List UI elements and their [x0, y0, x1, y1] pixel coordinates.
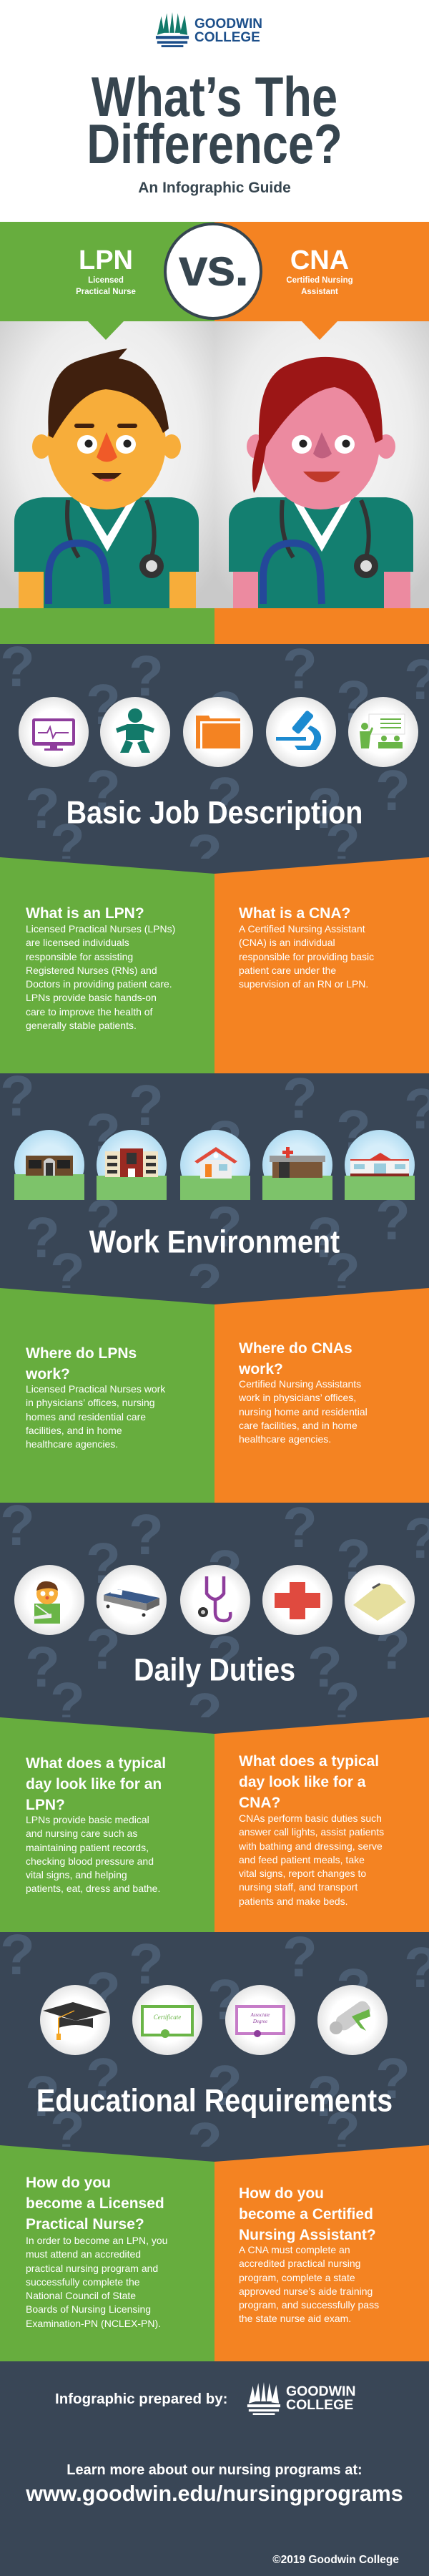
question mark pattern: section 1: ? [86, 758, 121, 822]
footer logo: GOODWIN [286, 2384, 356, 2399]
text: where do LPNs work: Licensed Practical Nurses work [26, 1383, 165, 1395]
text: where do CNAs work: nursing home and residential [239, 1406, 368, 1418]
question mark pattern: section 3 [0, 1503, 429, 1717]
text: where do CNAs work [239, 1340, 368, 1445]
panel: work environment [0, 1288, 429, 1503]
question mark pattern: section 4: ? [86, 2046, 121, 2110]
section title: Daily Duties: Daily Duties [134, 1652, 295, 1688]
text: what is an LPN: LPNs provide basic hands-on [26, 992, 157, 1003]
text: what is an LPN: responsible for assisting [26, 951, 133, 962]
question mark pattern: section 2: ? [25, 1206, 60, 1269]
question mark pattern: section 3: ? [307, 1635, 342, 1699]
icon: office [14, 1130, 84, 1200]
question mark pattern: section 4: ? [86, 1961, 121, 2024]
question mark pattern: section 4: ? [129, 1932, 164, 1996]
text: become CNA [239, 2185, 379, 2324]
question mark pattern: section 4 [0, 1932, 429, 2147]
icon: hospital bed [97, 1565, 167, 1635]
LPN label: LPN [79, 245, 133, 275]
icon: red cross [262, 1565, 332, 1635]
question mark pattern: section 4: ? [307, 2064, 342, 2128]
section title: Educational Requirements: Educational Requirements [36, 2083, 393, 2119]
text: become LPN: National Council of State [26, 2290, 136, 2301]
question mark pattern: section 2: ? [86, 1102, 121, 1166]
section title: Basic Job Description: Basic Job Description [66, 795, 363, 831]
question mark pattern: section 4: ? [207, 1968, 242, 2031]
text: where do LPNs work: in physicians’ offices, nursing [26, 1397, 155, 1408]
text: what is an LPN: Licensed Practical Nurses (LPNs) [26, 923, 175, 935]
icon: apartment [97, 1130, 167, 1200]
question mark pattern: section 3: ? [129, 1503, 164, 1566]
icon: folder [183, 697, 253, 767]
text: become LPN: practical nursing program and [26, 2263, 158, 2274]
footer: copyright: ©2019 Goodwin College [272, 2554, 399, 2566]
text: typical day LPN: checking blood pressure and [26, 1855, 154, 1867]
text: where do CNAs work: healthcare agencies. [239, 1433, 331, 1445]
question mark pattern: section 4: ? [25, 2064, 60, 2128]
question mark pattern: section 1: ? [129, 644, 164, 708]
question mark pattern: section 4: ? [375, 2046, 410, 2110]
text: what is a CNA: supervision of an RN or LPN. [239, 978, 368, 990]
question mark pattern: section 2: ? [207, 1109, 242, 1173]
icon: microscope [266, 697, 336, 767]
text: become LPN [26, 2175, 167, 2329]
question mark pattern: section 2: ? [375, 1188, 410, 1252]
text: where do CNAs work: Where do CNAs [239, 1340, 352, 1357]
text: where do LPNs work: Where do LPNs [26, 1345, 137, 1362]
female nurse [229, 357, 413, 608]
text: typical day LPN: LPN? [26, 1797, 65, 1813]
question mark pattern: section 2: ? [129, 1073, 164, 1137]
footer: prepared by [55, 2382, 356, 2415]
question mark pattern: section 1: ? [86, 673, 121, 736]
text: what is a CNA: What is a CNA? [239, 905, 350, 922]
icon: monitor [19, 697, 89, 767]
question mark pattern: section 2: ? [307, 1206, 342, 1269]
text: typical day CNA: What does a typical [239, 1753, 379, 1770]
text: where do CNAs work: care facilities, and in home [239, 1420, 358, 1431]
question mark pattern: section 3: ? [86, 1617, 121, 1681]
text: what is a CNA: A Certified Nursing Assistant [239, 923, 365, 935]
text: what is an LPN: Doctors in providing patient care. [26, 978, 172, 990]
footer: url: www.goodwin.edu/nursingprograms [26, 2482, 403, 2506]
question mark pattern: section 3: ? [336, 1528, 371, 1591]
icon: file folder [345, 1565, 415, 1635]
CNA label: Certified Nursing [286, 276, 353, 285]
question mark pattern: section 1: ? [375, 758, 410, 822]
icon: associate degree: Associate [250, 2012, 270, 2018]
header band: LPN vs CNA [0, 222, 429, 321]
text: where do LPNs work: facilities, and in home [26, 1425, 122, 1436]
title [87, 65, 342, 175]
CNA label: Assistant [301, 288, 338, 296]
panel: basic job description [0, 857, 429, 1073]
footer: prepared by: Infographic prepared by: [55, 2391, 227, 2407]
icon: clinic [262, 1130, 332, 1200]
question mark pattern: section 3: ? [375, 1617, 410, 1681]
title: What’s The [92, 65, 337, 128]
question mark pattern: section 1: ? [207, 766, 242, 829]
icon: stethoscope [180, 1565, 250, 1635]
question mark pattern: section 1: ? [336, 669, 371, 733]
text: become LPN: must attend an accredited [26, 2248, 141, 2260]
text: become CNA: program, and successfully pass [239, 2299, 379, 2311]
section title: Work Environment: Work Environment [89, 1224, 340, 1260]
text: become CNA: How do you [239, 2185, 324, 2202]
question mark pattern: section 2: ? [86, 1188, 121, 1252]
text: typical day CNA: patients and make beds. [239, 1896, 348, 1907]
footer logo [247, 2382, 356, 2415]
question mark pattern: section 3: ? [207, 1624, 242, 1688]
nurses illustration [0, 321, 429, 644]
text: become LPN: Examination-PN (NCLEX-PN). [26, 2318, 161, 2329]
icon: house [180, 1130, 250, 1200]
text: become CNA: program, complete a state [239, 2272, 355, 2283]
CNA label: CNA [290, 245, 349, 275]
text: what is a CNA: responsible for providing basic [239, 951, 374, 962]
text: what is an LPN: care to improve the health of [26, 1006, 152, 1018]
text: typical day LPN: vital signs, and helping [26, 1869, 127, 1880]
text: become LPN: successfully complete the [26, 2276, 140, 2288]
text: become LPN: How do you [26, 2175, 111, 2191]
question mark pattern: section 1 [0, 644, 429, 859]
text: what is an LPN [26, 905, 175, 1031]
icons row: daily duties [14, 1565, 415, 1635]
text: typical day LPN: maintaining patient records, [26, 1842, 149, 1853]
header logo: COLLEGE [194, 30, 260, 45]
LPN label: Practical Nurse [76, 288, 136, 296]
text: where do LPNs work: work? [26, 1366, 70, 1382]
icons row: work environment [14, 1130, 415, 1200]
header logo: GOODWIN [194, 16, 262, 31]
icon: certificate [132, 1985, 202, 2055]
text: typical day CNA: CNAs perform basic duties such [239, 1813, 382, 1824]
text: become CNA: A CNA must complete an [239, 2244, 350, 2255]
text: become CNA: Nursing Assistant? [239, 2227, 376, 2243]
text: typical day CNA: vital signs, report changes to [239, 1868, 366, 1879]
CNA label [286, 245, 353, 296]
text: what is an LPN: Registered Nurses (RNs) and [26, 965, 157, 976]
text: typical day CNA: CNA? [239, 1795, 280, 1811]
icon: diploma scroll [317, 1985, 388, 2055]
text: what is an LPN: generally stable patients. [26, 1020, 137, 1031]
vs circle: vs. [179, 238, 247, 297]
question mark pattern: section 2: ? [207, 1195, 242, 1259]
LPN label: Licensed [88, 276, 124, 285]
icon: associate degree [225, 1985, 295, 2055]
white header background [0, 0, 429, 222]
icon: associate degree: Degree [252, 2019, 267, 2024]
text: typical day LPN: patients, eat, dress and bathe. [26, 1883, 160, 1894]
subtitle: An Infographic Guide [138, 180, 291, 196]
header logo [156, 12, 262, 47]
text: typical day CNA [239, 1753, 384, 1907]
question mark pattern: section 3: ? [86, 1531, 121, 1595]
text: become LPN: Boards of Nursing Licensing [26, 2303, 151, 2315]
text: become LPN: Practical Nurse? [26, 2216, 144, 2233]
text: typical day LPN: What does a typical [26, 1755, 166, 1772]
question mark pattern: section 3: ? [25, 1635, 60, 1699]
text: typical day LPN: LPNs provide basic medical [26, 1814, 149, 1825]
text: what is a CNA: (CNA) is an individual [239, 937, 335, 948]
text: become CNA: become a Certified [239, 2206, 373, 2223]
question mark pattern: section 1: ? [207, 680, 242, 743]
text: where do LPNs work: healthcare agencies. [26, 1438, 118, 1450]
title: Difference? [87, 112, 342, 175]
icon: graduation cap [40, 1985, 110, 2055]
icon: teacher [348, 697, 418, 767]
text: become LPN: become a Licensed [26, 2195, 164, 2212]
question mark pattern: section 4: ? [207, 2054, 242, 2117]
text: typical day CNA: nursing staff, and transport [239, 1881, 358, 1893]
LPN label [76, 245, 136, 296]
text: typical day CNA: and feed patient meals, take [239, 1854, 365, 1865]
text: where do LPNs work: homes and residential care [26, 1411, 146, 1423]
text: become LPN: In order to become an LPN, you [26, 2235, 167, 2246]
question mark pattern: section 1: ? [25, 776, 60, 840]
text: what is a CNA: patient care under the [239, 965, 336, 976]
male nurse [14, 348, 199, 608]
text: become CNA: the state nurse aid exam. [239, 2313, 351, 2324]
text: where do LPNs work [26, 1345, 166, 1450]
icon: patient with sling [14, 1565, 84, 1635]
text: what is an LPN: are licensed individuals [26, 937, 129, 948]
question mark pattern: section 2 [0, 1073, 429, 1288]
icon: baby [100, 697, 170, 767]
text: what is a CNA [239, 905, 374, 990]
icon: certificate: Certificate [154, 2014, 181, 2021]
text: where do CNAs work: work in physicians’ offices, [239, 1392, 356, 1403]
question mark pattern: section 1: ? [307, 776, 342, 840]
text: typical day CNA: with bathing and dressing, serve [239, 1840, 383, 1852]
text: typical day CNA: day look like for a [239, 1774, 365, 1790]
text: what is an LPN: What is an LPN? [26, 905, 144, 922]
question mark pattern: section 4: ? [336, 1957, 371, 2021]
panel: educational requirements [0, 2145, 429, 2361]
text: typical day LPN: day look like for an [26, 1776, 162, 1792]
icons row: job description [19, 697, 418, 767]
text: where do CNAs work: Certified Nursing Assistants [239, 1378, 361, 1390]
panel: daily duties [0, 1717, 429, 1932]
question mark pattern: section 2: ? [336, 1098, 371, 1162]
text: become CNA: approved nurse’s aide training [239, 2285, 373, 2297]
text: typical day LPN [26, 1755, 166, 1894]
footer: learn more: Learn more about our nursing programs at: [66, 2462, 363, 2478]
icon: residential facility [345, 1130, 415, 1200]
text: typical day LPN: and nursing care such as [26, 1828, 137, 1839]
footer logo: COLLEGE [286, 2397, 353, 2413]
icons row: education [40, 1985, 388, 2055]
text: where do CNAs work: work? [239, 1361, 283, 1377]
vs circle [164, 223, 262, 320]
text: typical day CNA: answer call lights, assist patients [239, 1826, 384, 1838]
text: become CNA: accredited practical nursing [239, 2258, 360, 2269]
question mark pattern: section 3: ? [207, 1538, 242, 1602]
